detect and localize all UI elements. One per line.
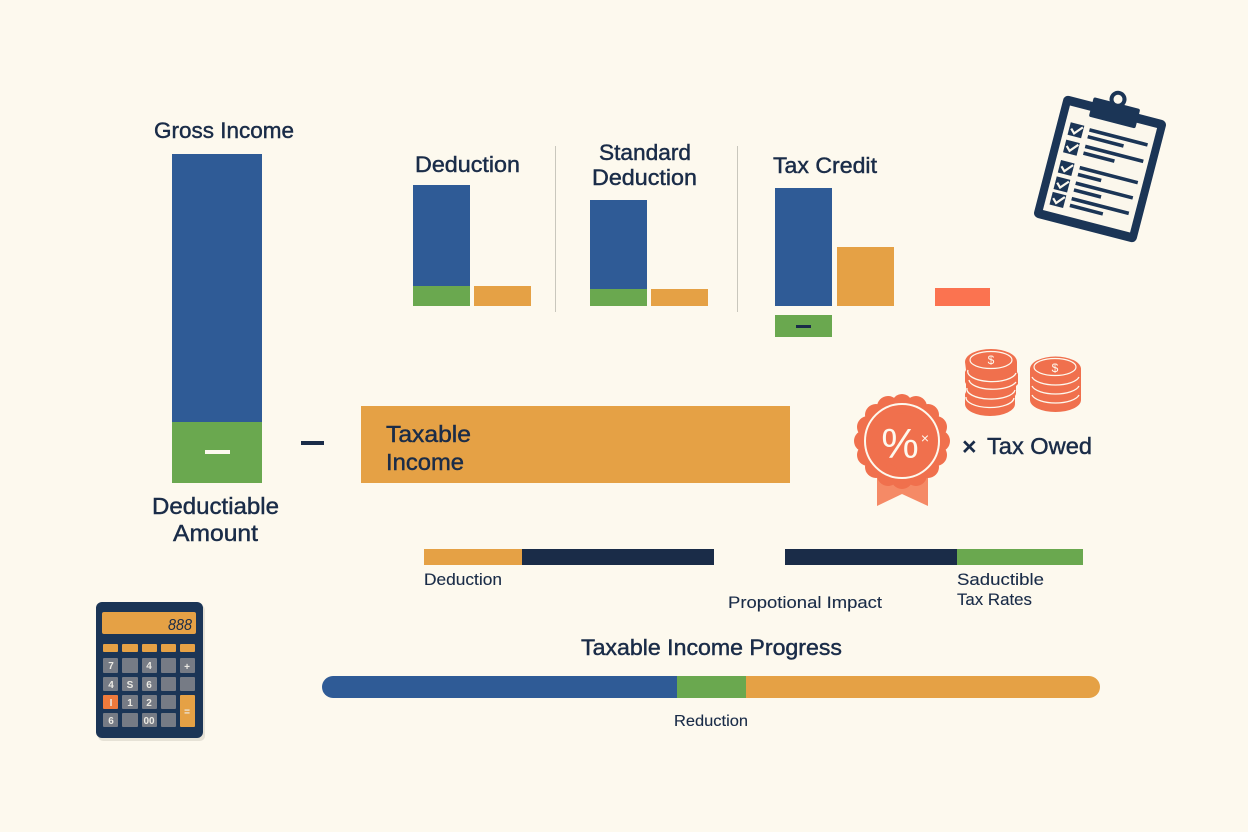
taxable income bar: Income <box>386 449 464 475</box>
panel: Deduction <box>413 152 531 306</box>
icon: calculator: 888 <box>168 617 192 634</box>
icon: coin stacks: $ <box>988 353 995 367</box>
icon: clipboard <box>1033 80 1171 243</box>
panel: Standard Deduction: Deduction <box>592 165 697 190</box>
icon: calculator: 1 <box>127 698 133 709</box>
panel: Standard Deduction <box>590 140 708 306</box>
icon: calculator: I <box>110 698 113 709</box>
icon: coin stacks <box>965 349 1081 416</box>
icon: percent badge: × <box>921 430 929 446</box>
heading: Taxable Income Progress: Taxable Income Progress <box>581 635 842 660</box>
minus sign <box>301 441 324 445</box>
gross income bar <box>172 154 262 483</box>
label: Tax Owed: × <box>962 433 977 461</box>
label: Deductiable Amount: Deductiable <box>152 493 279 519</box>
icon: calculator: 6 <box>146 680 152 691</box>
proportional bar right <box>785 549 1083 565</box>
icon: calculator: 6 <box>108 716 114 727</box>
icon: calculator: 4 <box>108 680 114 691</box>
taxable income bar: Taxable <box>386 421 471 447</box>
divider <box>555 146 556 312</box>
label: Saductible Tax Rates: Saductible <box>957 571 1044 589</box>
proportional bar left <box>424 549 714 565</box>
heading: Gross Income: Gross Income <box>154 118 294 143</box>
label: Propotional Impact: Propotional Impact <box>728 594 882 612</box>
taxable income bar <box>361 406 790 483</box>
divider <box>737 146 738 312</box>
icon: coin stacks: $ <box>1052 361 1059 375</box>
icon: calculator: + <box>184 662 190 673</box>
icon: percent badge <box>854 394 950 506</box>
label: Deductiable Amount: Amount <box>173 520 259 546</box>
panel: Tax Credit: Tax Credit <box>773 153 877 178</box>
icon: calculator: 4 <box>146 661 152 672</box>
icon: calculator <box>96 602 205 741</box>
label: Deductiable Amount <box>152 493 279 546</box>
panel: Tax Credit <box>773 153 990 337</box>
label: Deduction: Deduction <box>424 571 502 589</box>
label: Tax Owed: Tax Owed <box>987 433 1092 459</box>
icon: calculator: 2 <box>146 698 152 709</box>
icon: calculator: = <box>184 707 190 718</box>
label: Reduction: Reduction <box>674 713 748 730</box>
icon: calculator: 7 <box>108 661 114 672</box>
progress bar <box>322 676 1100 698</box>
icon: percent badge: % <box>881 420 919 467</box>
panel: Standard Deduction: Standard <box>599 140 691 165</box>
label: Saductible Tax Rates <box>957 571 1044 609</box>
icon: calculator: S <box>127 680 134 691</box>
icon: calculator: 00 <box>143 716 155 727</box>
panel: Deduction: Deduction <box>415 152 520 177</box>
label: Saductible Tax Rates: Tax Rates <box>957 591 1032 609</box>
